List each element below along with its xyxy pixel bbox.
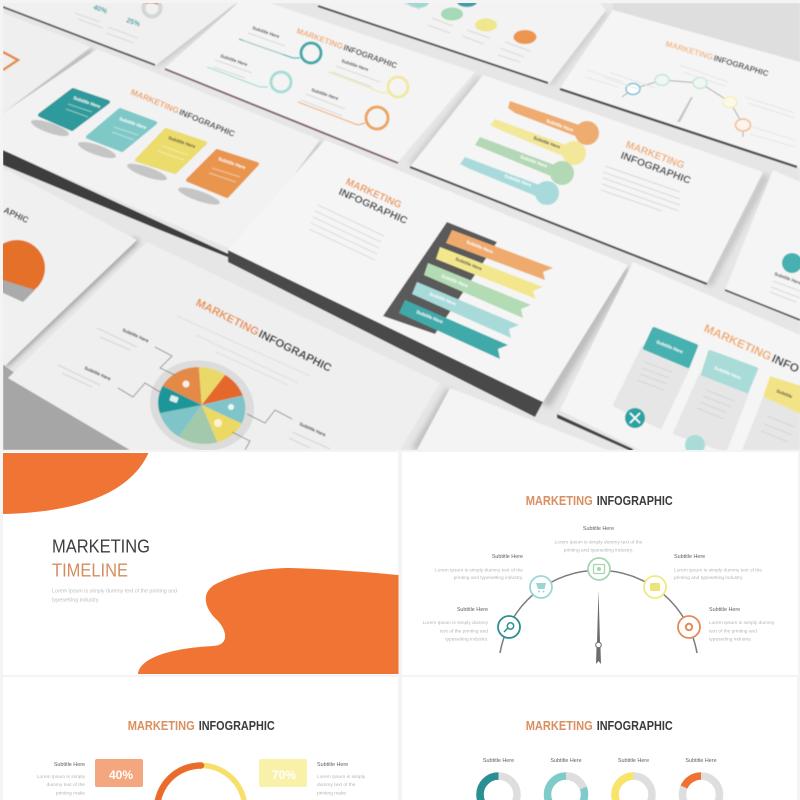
icon: green camera node	[588, 558, 610, 580]
text: lower left label: typesetting industry.	[445, 636, 488, 642]
text: lower right label: Lorem Ipsum is simply dummy	[709, 620, 775, 626]
chart: four coloured cards with shadows: Subtitle Here	[119, 116, 148, 130]
chart: pricing columns: Subtitle Here	[656, 339, 684, 355]
heading: arc slide title: MARKETING	[526, 494, 593, 508]
text: left label: Lorem Ipsum is simply	[37, 774, 86, 780]
text: cover description	[52, 588, 177, 604]
heading: cover title: MARKETING	[52, 536, 150, 556]
chart: four keyhole ribbons	[460, 101, 599, 205]
text: lower right label: typesetting industry.	[709, 636, 752, 642]
text: right label: Lorem Ipsum is simply	[317, 774, 366, 780]
panel: pie chart slide	[8, 242, 440, 462]
heading: cards slide title: MARKETINGINFOGRAPHIC	[129, 88, 236, 139]
chart: four keyhole ribbons: Subtitle Here	[533, 135, 561, 150]
icon: target on yellow slice	[214, 419, 222, 427]
text: upper right label: Lorem Ipsum is simply dummy text of the	[674, 568, 762, 574]
heading: arc slide title: INFOGRAPHIC	[597, 494, 673, 508]
chart: arc line	[500, 570, 697, 653]
panel: ribbon list slide	[410, 75, 763, 284]
chart: pricing columns: Subtitle	[776, 388, 794, 399]
text: cover description: Lorem Ipsum is simply dummy text of the printing and	[52, 588, 177, 594]
chart: four keyhole ribbons: Subtitle Here	[504, 173, 532, 188]
text: lower left label: Lorem Ipsum is simply dummy	[423, 620, 489, 626]
chart: four keyhole ribbons: Subtitle Here	[546, 118, 574, 133]
panel: left slide with chevron	[3, 13, 91, 113]
chart: orange donut	[682, 776, 720, 800]
chart: eight-slice pie	[150, 360, 254, 450]
panel: coloured cards slide	[3, 49, 320, 262]
heading: pie slide title: MARKETINGINFOGRAPHIC	[194, 297, 333, 375]
text: left label: Subtitle Here	[54, 762, 85, 768]
panel: slide with pink edge and connector lines: Subtitle Here	[311, 87, 340, 101]
chart: ribbon stack: Subtitle Here	[455, 256, 483, 272]
icon: needle	[596, 590, 601, 664]
chart: pricing columns: Subtitle Here	[714, 365, 742, 381]
text: cover description: typesetting industry.	[52, 598, 100, 604]
text: lower right label	[709, 607, 775, 642]
heading: arc slide title	[526, 494, 673, 508]
text: donut labels: Subtitle Here	[685, 758, 717, 764]
text: lower left label	[423, 607, 489, 642]
icon: group on teal slice	[169, 395, 179, 403]
text: upper right label: printing and typesetting industry.	[674, 575, 743, 581]
panel: perspective slide collage	[0, 0, 800, 462]
heading: timeline slide title: MARKETINGINFOGRAPHIC	[664, 39, 770, 78]
text: left label	[37, 762, 86, 796]
chart: yellow donut	[615, 776, 652, 800]
panel: table cards slide	[557, 262, 800, 455]
text: lower right label: Subtitle Here	[709, 607, 740, 613]
icon: bulb on orange slice	[182, 380, 190, 388]
text: upper right label: Subtitle Here	[674, 554, 705, 560]
text: lower left label: text of the printing and	[440, 628, 488, 634]
chart: light teal donut	[548, 776, 584, 800]
chart: pricing columns	[615, 329, 800, 455]
chart: leader lines	[118, 347, 292, 450]
heading: donut slide title: MARKETING	[526, 719, 593, 733]
heading: connector slide title: MARKETINGINFOGRAPHIC	[295, 26, 398, 70]
heading: ring slide title	[128, 719, 275, 733]
callout: 70% box	[259, 759, 307, 787]
text: donut labels: Subtitle Here	[550, 758, 582, 764]
heading: table slide title: MARKETINGINFO	[702, 323, 800, 376]
text: top centre label: Subtitle Here	[583, 526, 614, 532]
heading: ring slide title: MARKETING	[128, 719, 195, 733]
panel: top-left slide with percentages: 25%	[125, 17, 142, 29]
panel: left partial slide with orange circle: APHIC	[2, 205, 30, 225]
heading: donut slide title: INFOGRAPHIC	[597, 719, 673, 733]
panel: dark ribbon stack slide	[228, 140, 628, 417]
text: right label: printing make	[317, 790, 346, 796]
text: top centre label: Lorem Ipsum is simply dummy text of the	[554, 540, 643, 546]
panel: top-left slide with percentages	[3, 0, 236, 65]
icon: light teal cart node	[530, 576, 552, 598]
text: donut labels: Subtitle Here	[618, 758, 649, 764]
heading: cover title: TIMELINE	[52, 560, 128, 580]
text: upper left label: Lorem Ipsum is simply dummy text of the	[435, 568, 523, 574]
text: top centre label	[554, 526, 643, 554]
panel: left partial slide with orange circle	[0, 168, 137, 365]
text: donut labels	[483, 758, 717, 764]
text: lower left label: Subtitle Here	[457, 607, 488, 613]
text: upper left label	[435, 554, 523, 581]
text: upper left label: printing and typesetting industry.	[454, 575, 523, 581]
panel: slide with pink edge and connector lines: Subtitle Here	[252, 25, 281, 39]
panel: arc timeline slide	[402, 452, 798, 675]
chart: progress ring	[157, 766, 245, 800]
chart: four keyhole ribbons: Subtitle Here	[520, 154, 548, 169]
chart: ribbon stack: Subtitle Here	[429, 291, 457, 307]
heading: stack slide title: MARKETING	[344, 177, 403, 211]
chart: four coloured cards with shadows: Subtitle Here	[218, 156, 247, 170]
text: pie labels: Subtitle Here	[122, 327, 150, 344]
panel: percentage ring slide	[3, 677, 398, 800]
text: left label: dummy text of the	[46, 782, 85, 788]
icon: orange bottom blob	[138, 568, 398, 674]
icon: orange top blob	[3, 453, 148, 514]
panel: marketing timeline cover slide	[3, 452, 398, 675]
text: top centre label: printing and typesetting industry.	[564, 548, 633, 554]
text: donut labels: Subtitle Here	[483, 758, 514, 764]
chart: four coloured cards with shadows	[29, 90, 257, 208]
text: pie labels: Subtitle Here	[299, 421, 327, 438]
panel: top-left slide with percentages: 40%	[92, 4, 109, 16]
panel: four donut slide	[402, 677, 797, 800]
panel: slide with pink edge and connector lines	[165, 3, 475, 163]
callout: 40% box: 40%	[109, 768, 133, 782]
text: upper right label	[674, 554, 762, 581]
heading: ribbon slide title	[619, 140, 692, 187]
callout: 40% box	[95, 759, 143, 787]
panel: top centre slide with round icons	[318, 0, 606, 84]
heading: ring slide title: INFOGRAPHIC	[199, 719, 275, 733]
text: upper left label: Subtitle Here	[492, 554, 523, 560]
panel: lower centre slide piece	[417, 388, 604, 450]
chart: four coloured cards with shadows: Subtitle Here	[73, 95, 102, 109]
text: left label: printing make	[56, 790, 85, 796]
heading: donut slide title	[526, 719, 673, 733]
icon: person on light teal slice	[228, 404, 234, 410]
text: right label	[317, 762, 366, 796]
chart: four coloured cards with shadows: Subtitle Here	[168, 135, 197, 149]
heading: ribbon slide title: MARKETING	[624, 140, 686, 172]
heading: cover title	[52, 536, 150, 580]
heading: stack slide title: INFOGRAPHIC	[337, 187, 409, 227]
icon: orange gear node	[678, 616, 700, 638]
text: lower right label: text of the printing and	[709, 628, 757, 634]
text: pie labels: Subtitle Here	[84, 365, 112, 382]
text: pie labels	[58, 327, 330, 449]
chart: ribbon stack	[383, 222, 553, 359]
panel: right partial slide top	[725, 170, 800, 320]
chart: ribbon stack: Subtitle Here	[441, 273, 469, 289]
heading: ribbon slide title: INFOGRAPHIC	[619, 151, 692, 187]
icon: yellow folder node	[644, 576, 666, 598]
panel: slide with pink edge and connector lines: Subtitle Here	[220, 53, 249, 67]
chart: teal donut	[480, 776, 517, 800]
chart: ribbon stack: Subtitle Here	[466, 239, 494, 255]
icon: teal search node	[498, 616, 520, 638]
text: right label: dummy text of the	[317, 782, 356, 788]
panel: top right slide with timeline curve	[560, 10, 800, 168]
chart: ribbon stack: Subtitle Here	[416, 309, 444, 325]
text: right label: Subtitle Here	[317, 762, 348, 768]
panel: slide with pink edge and connector lines: Subtitle Here	[341, 58, 370, 72]
callout: 70% box: 70%	[272, 768, 296, 782]
